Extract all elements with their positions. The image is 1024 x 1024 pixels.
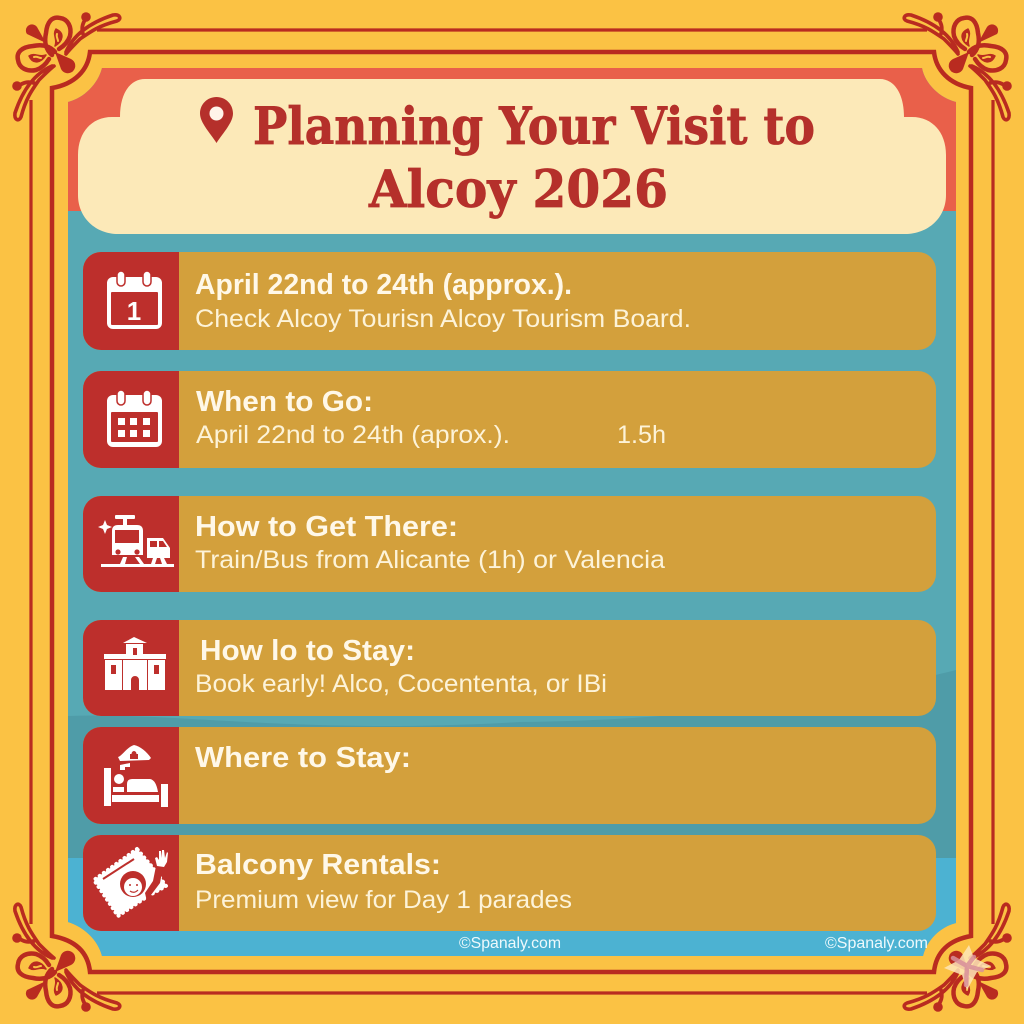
title text: Planning Your Visit to	[253, 97, 815, 157]
corner ornament: top right	[904, 12, 1012, 120]
row 1 text	[195, 269, 691, 333]
row 5: where to stay	[83, 727, 936, 824]
icon: castle building	[104, 637, 166, 690]
icon: calendar with number 1	[107, 271, 162, 329]
icon: bed with tent	[104, 745, 168, 807]
title plaque	[78, 79, 946, 234]
row 6 text	[195, 849, 572, 914]
row 2 text: 1.5h	[617, 421, 666, 449]
row 6 text: Premium view for Day 1 parades	[195, 886, 572, 914]
title text	[253, 97, 815, 220]
row 2 text: April 22nd to 24th (aprox.).	[196, 421, 510, 449]
icon: map pin	[200, 97, 233, 143]
corner ornament: top left	[12, 12, 120, 120]
row 2 text	[196, 386, 666, 449]
row 1: dates	[83, 252, 936, 350]
row 1 text: April 22nd to 24th (approx.).	[195, 269, 572, 301]
row 4 text: Book early! Alco, Cocententa, or IBi	[195, 670, 607, 698]
icon: train and bus	[98, 515, 174, 567]
row 5 text: Where to Stay:	[195, 742, 411, 774]
corner ornament: bottom left	[12, 904, 120, 1012]
row 4: how to stay	[83, 620, 936, 716]
panel: main background	[68, 68, 956, 956]
row 6: balcony rentals	[83, 835, 936, 931]
icon: balcony stamp with waving person	[94, 849, 168, 916]
watermark left: ©Spanaly.com	[459, 935, 561, 952]
row 4 text: How lo to Stay:	[200, 635, 415, 667]
watermark right: ©Spanaly.com	[825, 935, 928, 952]
row 6 text: Balcony Rentals:	[195, 849, 441, 881]
row 2 text: When to Go:	[196, 386, 373, 418]
row 4 text	[195, 635, 607, 698]
row 1 text: Check Alcoy Tourisn Alcoy Tourism Board.	[195, 305, 691, 333]
icon: calendar with number 1: 1	[127, 296, 141, 326]
row 3 text: How to Get There:	[195, 511, 458, 543]
watermark star	[944, 945, 991, 990]
row 3 text: Train/Bus from Alicante (1h) or Valencia	[195, 546, 665, 574]
corner ornament: bottom right	[904, 904, 1012, 1012]
icon: calendar grid	[107, 390, 162, 447]
row 3: how to get there	[83, 496, 936, 592]
row 3 text	[195, 511, 665, 574]
title text: Alcoy 2026	[368, 160, 668, 220]
row 2: when to go	[83, 371, 936, 468]
